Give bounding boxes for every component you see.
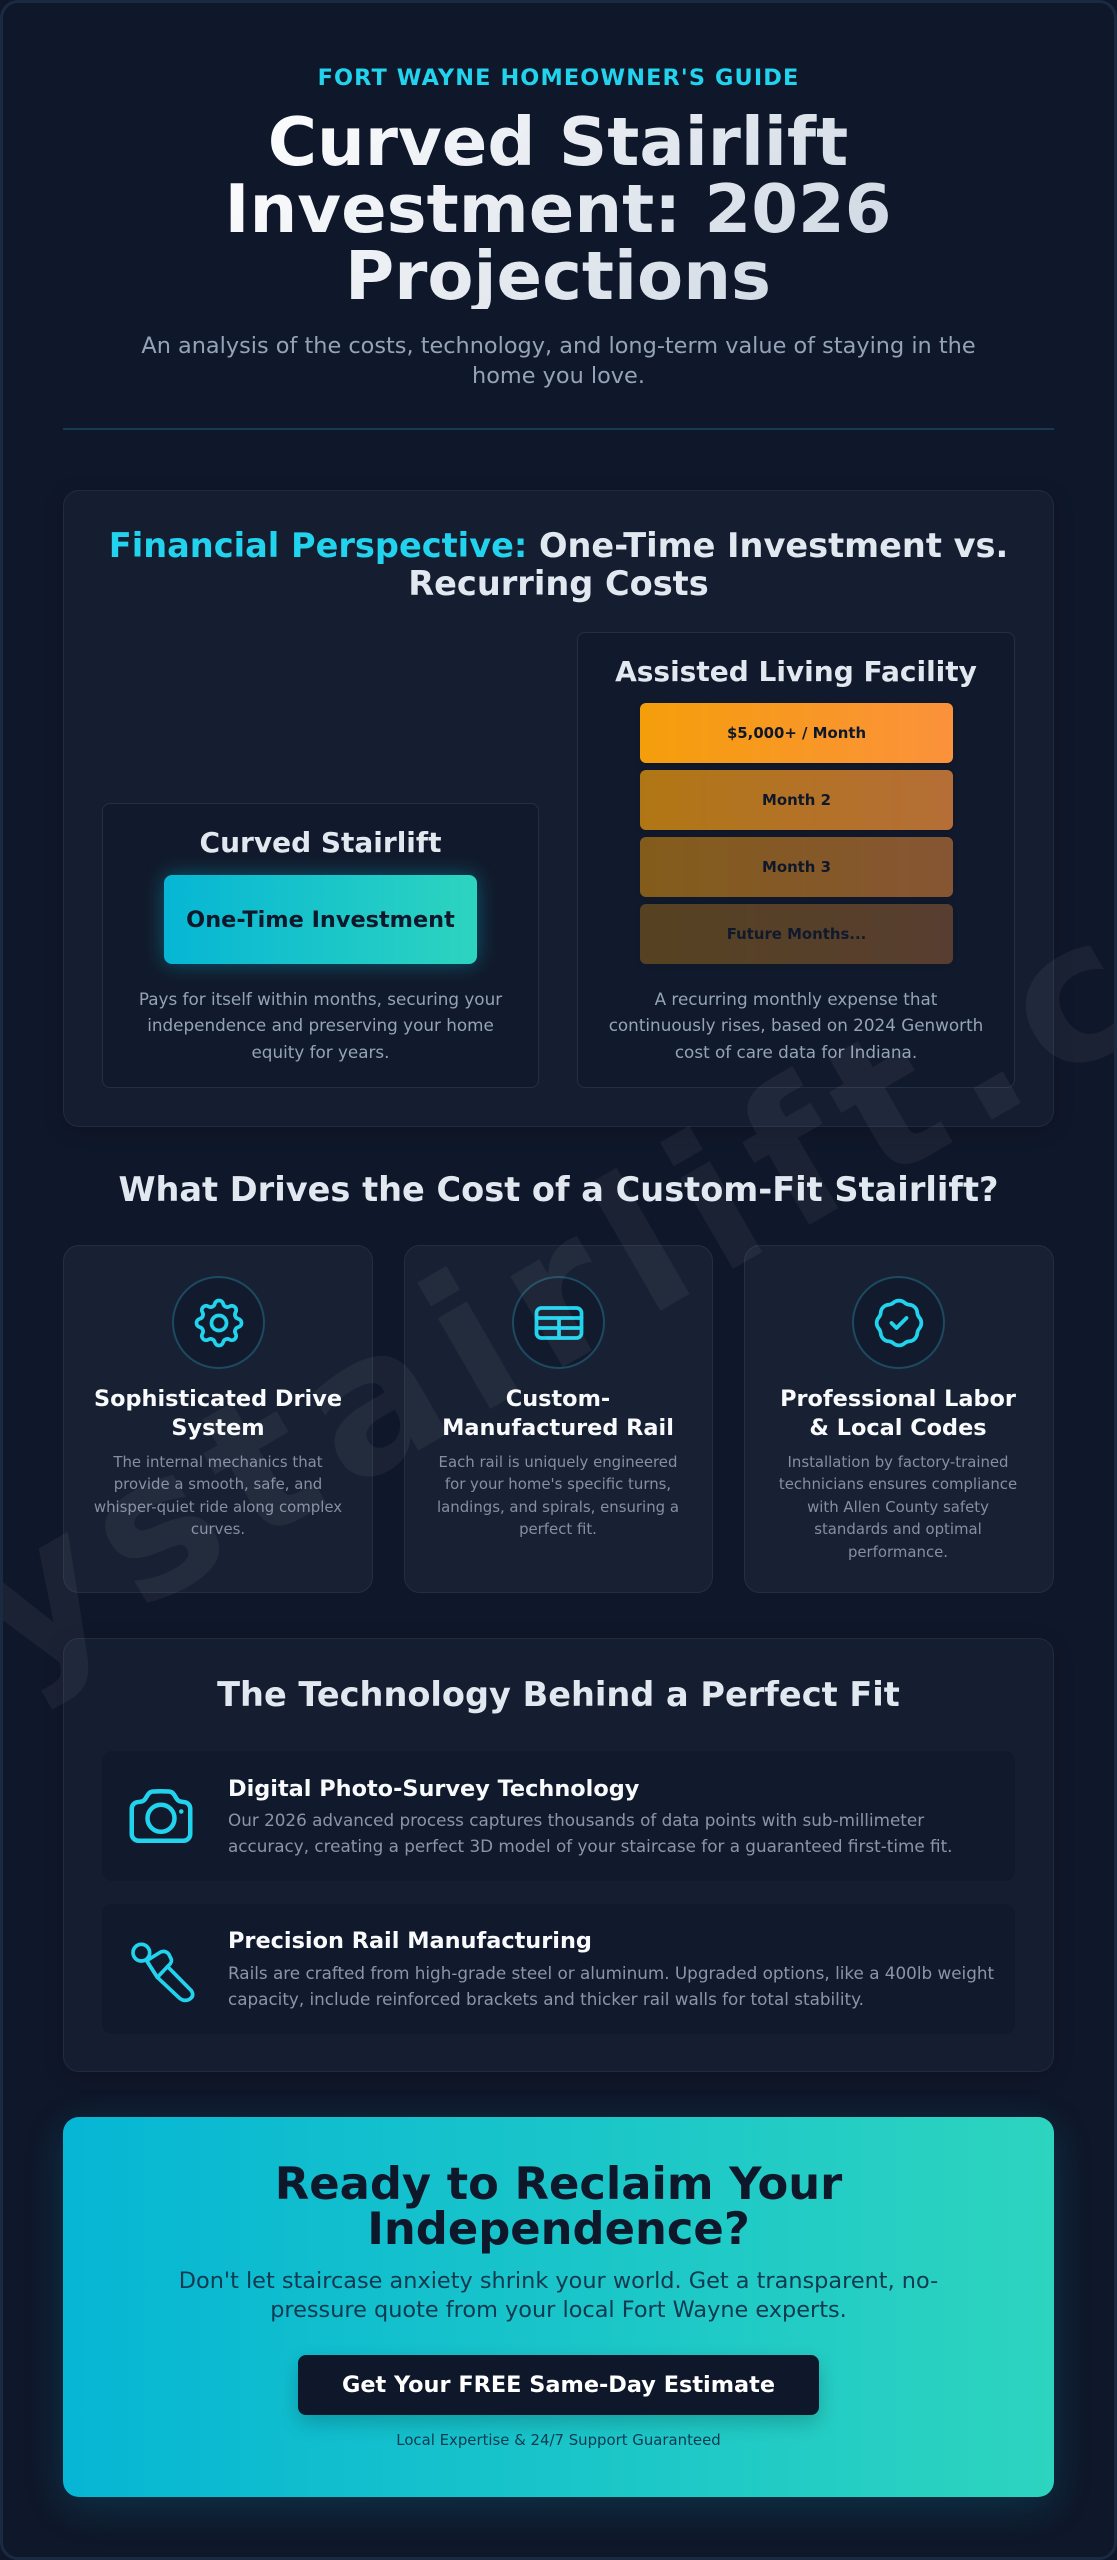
icon: gear [194, 1298, 244, 1348]
panel: financial perspective [63, 490, 1054, 1127]
card: drive system [63, 1245, 373, 1593]
text: assisted living description: continuously rises, based on 2024 Genworth [609, 1015, 983, 1035]
card: curved stairlift [102, 803, 539, 1088]
card title: drive system: Sophisticated Drive [94, 1386, 342, 1412]
bar: future months [640, 904, 953, 964]
cta text [179, 2268, 938, 2323]
icon: camera [130, 1789, 192, 1843]
card title: labor [780, 1386, 1016, 1441]
bar: month 1 [640, 703, 953, 763]
bar: month 2: Month 2 [762, 791, 831, 809]
card title: rail [442, 1386, 674, 1441]
card text: labor: technicians ensures compliance [779, 1475, 1017, 1493]
cta button: Get Your FREE Same-Day Estimate [342, 2372, 775, 2398]
cta heading: Ready to Reclaim Your [275, 2157, 842, 2210]
subtitle: home you love. [472, 362, 645, 388]
card text: drive system: provide a smooth, safe, and [114, 1475, 322, 1493]
divider [63, 428, 1054, 430]
icon circle: gear [172, 1276, 265, 1369]
icon circle: badge [852, 1276, 945, 1369]
card title: drive system: System [171, 1415, 265, 1441]
eyebrow: FORT WAYNE HOMEOWNER'S GUIDE [318, 65, 799, 91]
header [63, 65, 1054, 430]
panel: call to action [63, 2117, 1054, 2497]
heading: financial perspective: Financial Perspective: One-Time Investment vs. [109, 526, 1008, 565]
text: stairlift description [139, 989, 502, 1062]
text: assisted living description: cost of care data for Indiana. [675, 1042, 917, 1062]
card title: drive system [94, 1386, 342, 1441]
card text: drive system [94, 1453, 342, 1538]
card text: rail [437, 1453, 679, 1538]
cta heading: Independence? [367, 2202, 750, 2255]
card text: rail: perfect fit. [519, 1520, 597, 1538]
row text: photo survey: accuracy, creating a perfect 3D model of your staircase for a guaranteed first-time fit. [228, 1836, 952, 1856]
icon: check badge [874, 1298, 924, 1348]
row: photo survey [102, 1751, 1015, 1881]
card text: labor [779, 1453, 1017, 1561]
card text: rail: Each rail is uniquely engineered [439, 1453, 677, 1471]
bar: month 3 [640, 837, 953, 897]
title: Projections [345, 237, 771, 315]
cta note: Local Expertise & 24/7 Support Guaranteed [396, 2431, 721, 2449]
title: Curved Stairlift [268, 103, 848, 181]
row text: rail manufacturing: capacity, include reinforced brackets and thicker rail walls for total stability. [228, 1989, 864, 2009]
bar: future months: Future Months... [727, 925, 866, 943]
text: stairlift description: Pays for itself within months, securing your [139, 989, 502, 1009]
card: labor [744, 1245, 1054, 1593]
heading: technology: The Technology Behind a Perfect Fit [217, 1675, 900, 1714]
card text: labor: performance. [848, 1543, 948, 1561]
row text: rail manufacturing [228, 1963, 994, 2009]
card: assisted living [577, 632, 1015, 1088]
block: one-time investment [164, 875, 477, 964]
bar: month 2 [640, 770, 953, 830]
text: stairlift description: equity for years. [251, 1042, 390, 1062]
row: rail manufacturing [102, 1904, 1015, 2034]
cta button [298, 2355, 819, 2415]
card title: assisted living: Assisted Living Facility [615, 655, 977, 688]
text: stairlift description: independence and preserving your home [147, 1015, 494, 1035]
card text: rail: for your home's specific turns, [445, 1475, 671, 1493]
row text: photo survey [228, 1810, 952, 1856]
card title: rail: Manufactured Rail [442, 1415, 674, 1441]
card text: drive system: The internal mechanics that [113, 1453, 323, 1471]
card text: labor: with Allen County safety [807, 1498, 989, 1516]
card: rail [404, 1245, 713, 1593]
card text: labor: standards and optimal [814, 1520, 982, 1538]
card title: labor: & Local Codes [809, 1415, 987, 1441]
row text: photo survey: Our 2026 advanced process captures thousands of data points with sub-millimeter [228, 1810, 924, 1830]
panel: technology [63, 1638, 1054, 2072]
subtitle: An analysis of the costs, technology, and long-term value of staying in the [141, 333, 976, 359]
cta text: Don't let staircase anxiety shrink your world. Get a transparent, no- [179, 2268, 938, 2294]
card title: curved stairlift: Curved Stairlift [200, 826, 441, 859]
card text: drive system: whisper-quiet ride along complex [94, 1498, 342, 1516]
title: Investment: 2026 [224, 170, 892, 248]
card text: labor: Installation by factory-trained [787, 1453, 1009, 1471]
icon: precision tool [131, 1942, 194, 2002]
block: one-time investment: One-Time Investment [186, 907, 455, 933]
heading: financial perspective [109, 526, 1008, 603]
bar: month 1: $5,000+ / Month [727, 724, 866, 742]
text: assisted living description: A recurring monthly expense that [655, 989, 937, 1009]
icon: table [534, 1306, 584, 1340]
row title: photo survey: Digital Photo-Survey Technology [228, 1776, 639, 1802]
text: assisted living description [609, 989, 983, 1062]
card title: labor: Professional Labor [780, 1386, 1016, 1412]
row text: rail manufacturing: Rails are crafted from high-grade steel or aluminum. Upgraded options, like a 400lb weight [228, 1963, 994, 1983]
cta text: pressure quote from your local Fort Wayne experts. [270, 2297, 847, 2323]
subtitle [141, 333, 976, 388]
heading: financial perspective: Recurring Costs [408, 564, 709, 603]
icon circle: rail [512, 1276, 605, 1369]
bar: month 3: Month 3 [762, 858, 831, 876]
cta heading [275, 2157, 842, 2255]
row title: rail manufacturing: Precision Rail Manufacturing [228, 1928, 592, 1954]
heading: cost drivers: What Drives the Cost of a Custom-Fit Stairlift? [118, 1170, 999, 1209]
title [208, 109, 908, 309]
card text: rail: landings, and spirals, ensuring a [437, 1498, 679, 1516]
card title: rail: Custom- [506, 1386, 610, 1412]
card text: drive system: curves. [191, 1520, 245, 1538]
